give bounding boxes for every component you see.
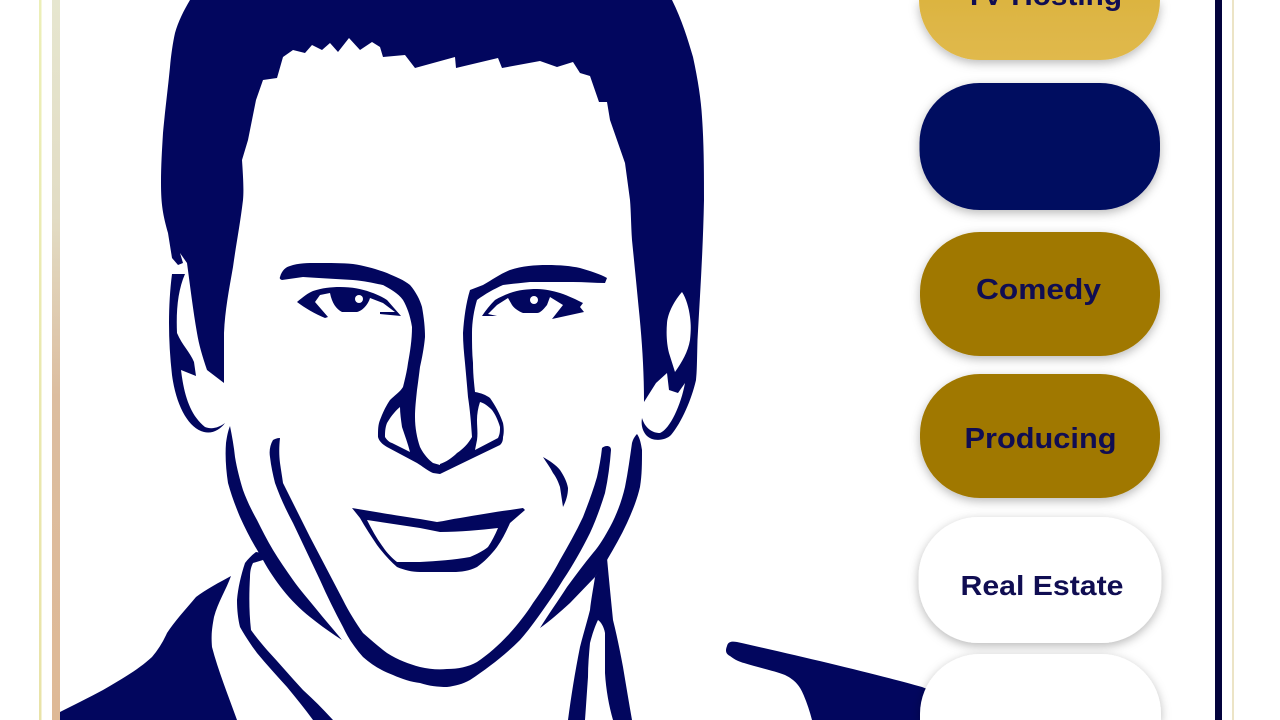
- portrait: right jacket lapel: [726, 642, 935, 720]
- portrait illustration: [60, 0, 935, 720]
- portrait: left brow, nose line and nostril: [280, 263, 440, 474]
- portrait: left eye: [297, 287, 401, 318]
- pill: Real Estate: [918, 517, 1162, 643]
- portrait: left jacket lapel: [60, 576, 237, 720]
- portrait: left jaw line: [226, 426, 342, 640]
- pill: Real Estate: Real Estate: [960, 570, 1124, 601]
- pill: Comedy: Comedy: [976, 274, 1101, 306]
- frame: right thin line: [1232, 0, 1234, 720]
- portrait: right eye highlight: [530, 296, 538, 304]
- pill: Producing: Producing: [964, 423, 1116, 455]
- frame: left thick line: [52, 0, 60, 720]
- portrait: right collar and tie: [568, 558, 632, 720]
- portrait: left eye highlight: [355, 295, 363, 303]
- portrait: chin line: [270, 438, 611, 687]
- portrait: cheek mark: [543, 457, 568, 507]
- pill: Producing: [920, 374, 1160, 498]
- portrait: right eye: [482, 289, 584, 319]
- pill: navy blank: [920, 83, 1160, 210]
- pill: white blank: [920, 654, 1161, 720]
- portrait: right brow, nose line and nostril: [440, 265, 607, 474]
- portrait: left collar line: [237, 552, 333, 720]
- frame: right navy line: [1215, 0, 1222, 720]
- pill: Comedy: [920, 232, 1160, 356]
- pill: TV Hosting: [919, 0, 1160, 60]
- frame: left thin line: [39, 0, 42, 720]
- portrait: right jaw line: [540, 434, 642, 628]
- portrait: left ear: [169, 274, 225, 433]
- portrait: mouth: [352, 508, 525, 572]
- portrait: hair and right ear: [161, 0, 704, 440]
